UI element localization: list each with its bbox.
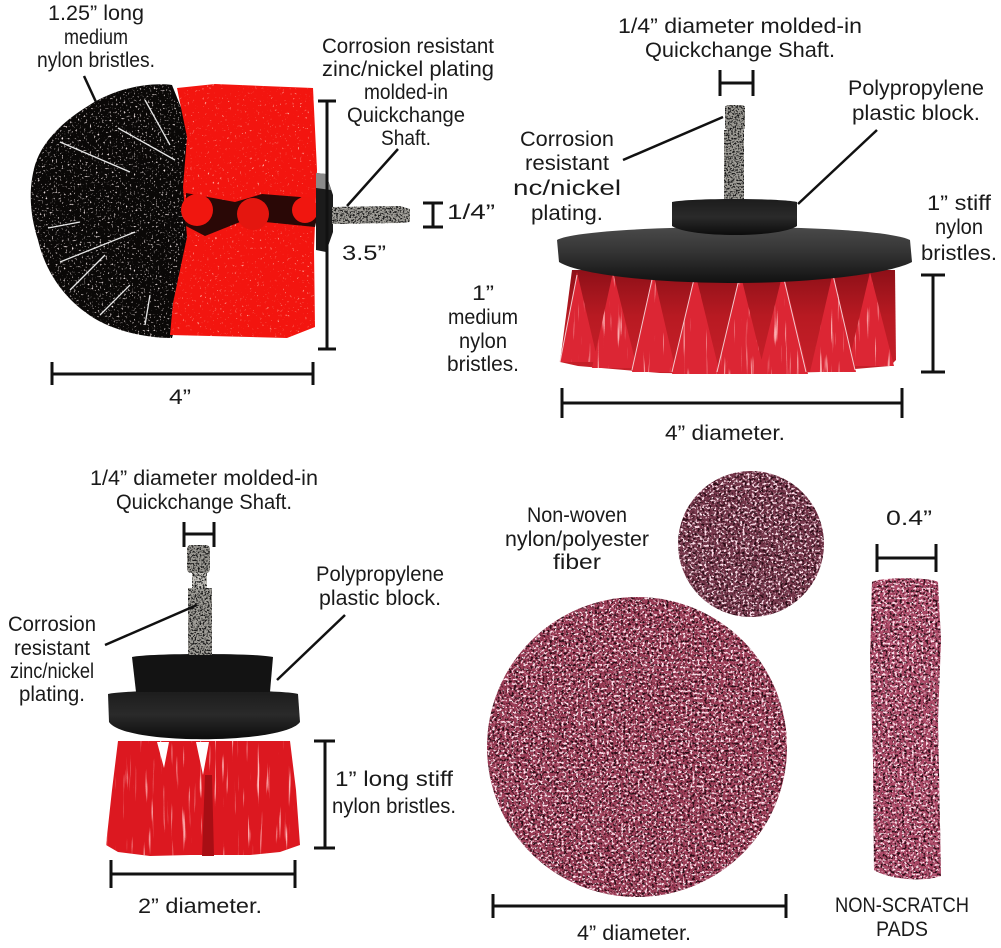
label: flat brush plating [513,128,621,225]
label: polypropylene block: Polypropylene [848,77,984,100]
icon: red bristle tufts [106,741,300,856]
arrow: small block pointer [277,615,345,680]
icon: hub [132,654,273,692]
dimension: shaft width [423,203,443,227]
label: flat brush shaft: Quickchange Shaft. [645,39,835,62]
icon: small pad [678,471,824,617]
label: fiber: fiber [553,551,601,574]
label: 1/4 inch: 1/4” [447,201,495,224]
label: medium bristles: medium [448,306,518,329]
arrow: shaft pointer [347,149,398,206]
icon: hub block [672,199,797,235]
icon: disc rim [557,227,912,283]
label: flat brush shaft: 1/4” diameter molded-in [618,15,862,38]
label: long stiff bristles: 1” long stiff [335,768,453,791]
dimension: brush width [52,362,313,385]
label: stiff bristles [921,192,997,265]
label: flat brush shaft [618,15,862,62]
label: medium bristles: 1” [472,282,494,305]
label: flat brush 4 inch diameter: 4” diameter. [665,422,785,445]
label: 3.5 inch: 3.5” [342,242,386,265]
label: fiber: nylon/polyester [505,528,649,551]
label: small brush plating: zinc/nickel [10,660,94,683]
label: corrosion resistant plating: molded-in [364,81,448,104]
label: stiff bristles: nylon [935,216,983,239]
panel: 2 inch drill brush [106,545,300,856]
label: flat brush plating: resistant [525,152,609,175]
label: long nylon bristles: nylon bristles. [37,49,155,72]
label: small brush plating [8,613,96,706]
label: small brush shaft: 1/4” diameter molded-in [90,467,318,490]
label: corrosion resistant plating: Shaft. [381,127,431,150]
label: polypropylene block [848,77,984,125]
dimension: large pad diameter [493,894,786,918]
label: stiff bristles: 1” stiff [927,192,991,215]
icon: rim [108,690,300,739]
dimension: bristle length [921,275,945,372]
icon: red bristles [560,270,896,374]
icon: pad edge [870,578,941,879]
label: polypropylene block: plastic block. [852,102,980,125]
arrow: plating pointer [623,117,723,160]
label: medium bristles [447,282,519,376]
dimension: flat brush diameter [562,388,902,418]
dimension: small bristle length [314,741,335,848]
label: fiber [505,504,649,574]
dimension: brush height [318,101,336,349]
label: 4 inch: 4” [169,386,191,409]
icon: red bristle half [170,84,317,338]
label: stiff bristles: bristles. [921,242,997,265]
label: medium bristles: nylon [459,330,507,353]
label: small brush plating: Corrosion [8,613,96,636]
panel: ball drill brush [31,84,410,338]
label: non-scratch pads [835,894,969,941]
label: non-scratch pads: NON-SCRATCH [835,894,969,917]
icon: brush hub and shaft [316,173,410,252]
icon: hex shaft [724,105,745,199]
label: long stiff bristles [332,768,456,818]
label: flat brush plating: Corrosion [520,128,614,151]
label: flat brush plating: plating. [531,202,603,225]
label: small brush plating: resistant [14,637,90,660]
label: corrosion resistant plating: zinc/nickel plating [322,58,494,81]
label: fiber: Non-woven [527,504,627,527]
arrow: bristle pointer [84,76,96,102]
dimension: pad thickness [877,544,936,572]
label: 0.4 inch: 0.4” [886,507,932,530]
arrow: block pointer [798,130,877,204]
label: large pad diameter: 4” diameter. [577,922,691,945]
dimension: small shaft width [184,522,214,547]
arrow: small plating pointer [105,605,197,645]
label: corrosion resistant plating [322,35,494,150]
label: non-scratch pads: PADS [876,918,928,941]
label: small brush shaft: Quickchange Shaft. [116,491,292,514]
label: medium bristles: bristles. [447,353,519,376]
icon: brush centre knot [181,193,320,236]
icon: large pad [487,597,787,897]
label: small polypropylene block: Polypropylene [316,563,444,586]
label: small brush shaft [90,467,318,514]
label: small polypropylene block [316,563,444,610]
icon: shaft [187,545,212,655]
dimension: small diameter [111,860,295,888]
label: long nylon bristles: 1.25” long [48,2,144,25]
dimension: flat brush shaft width [720,70,753,96]
label: small polypropylene block: plastic block. [319,587,441,610]
icon: black bristle half [31,84,195,338]
panel: flat 4 inch drill brush [557,105,912,374]
label: 2 inch diameter: 2” diameter. [138,895,262,918]
label: long stiff bristles: nylon bristles. [332,795,456,818]
label: long nylon bristles: medium [64,26,128,49]
label: corrosion resistant plating: Quickchange [347,104,465,127]
label: small brush plating: plating. [19,683,85,706]
label: long nylon bristles [37,2,155,72]
label: flat brush plating: nc/nickel [513,177,621,200]
label: corrosion resistant plating: Corrosion resistant [322,35,494,58]
